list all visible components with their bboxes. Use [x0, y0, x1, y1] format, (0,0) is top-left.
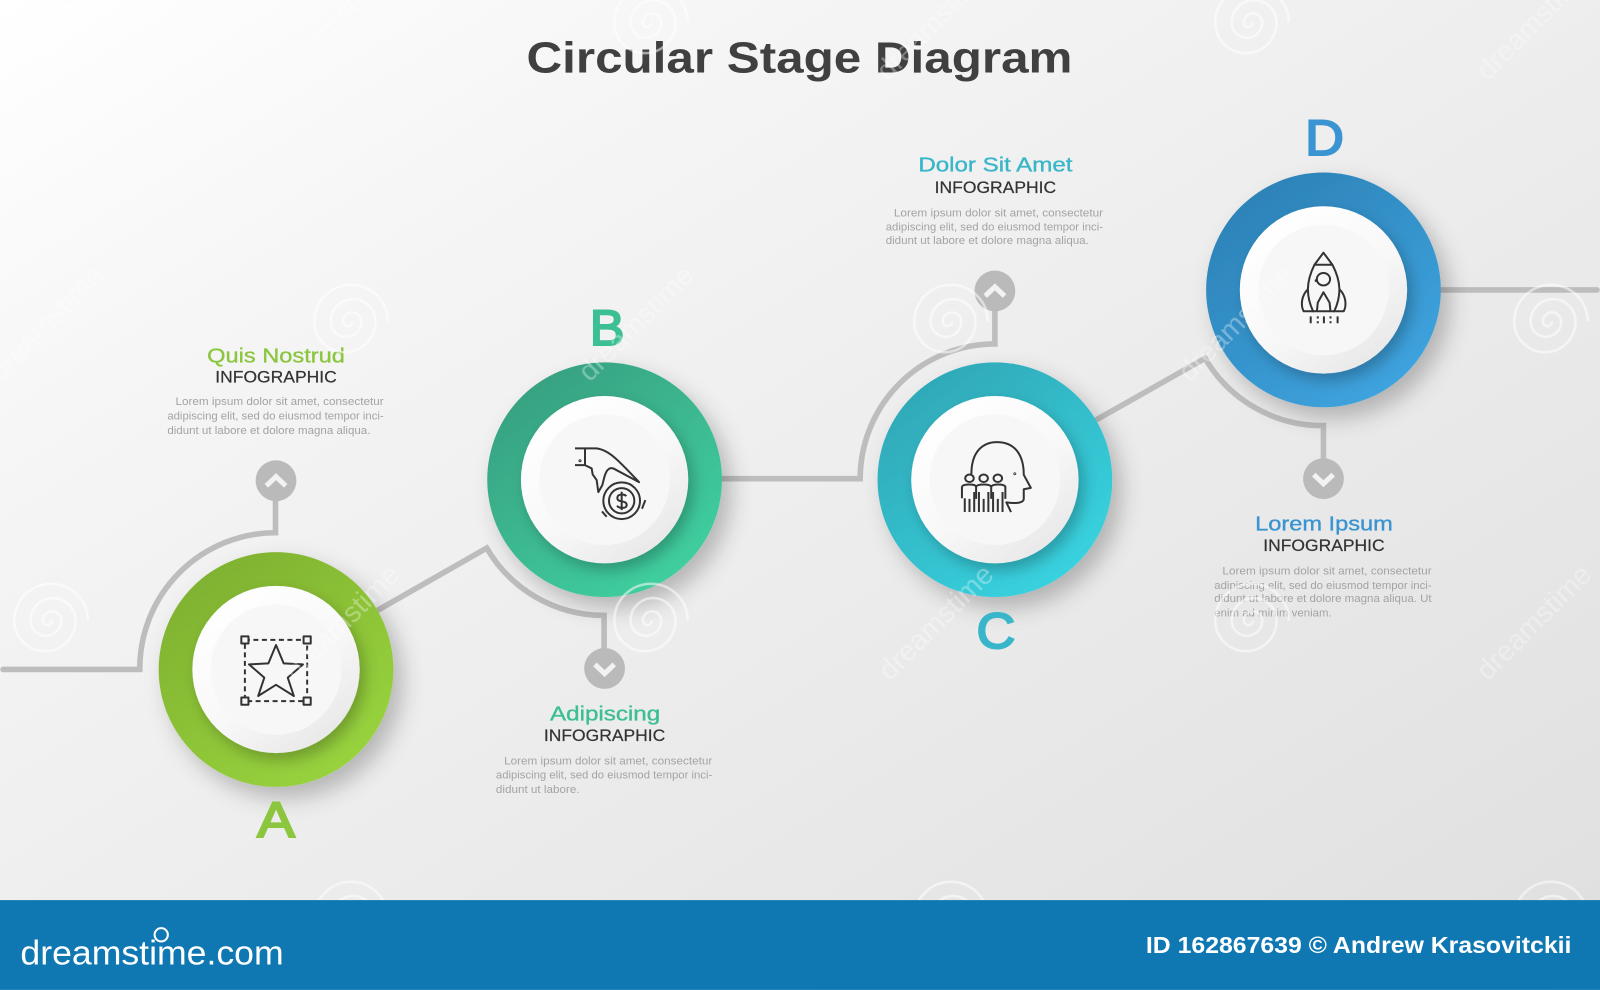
letter A: A — [257, 792, 296, 848]
watermark overlay: dreamstime — [278, 559, 406, 687]
watermark overlay: dreamstime — [1172, 260, 1300, 388]
text block: Lorem Ipsum — [1214, 514, 1433, 619]
title: Circular Stage Diagram — [527, 34, 1072, 83]
text block: Lorem Ipsum: adipiscing elit, sed do eiusmod tempor inci- — [1214, 580, 1432, 592]
letter D: D — [1305, 110, 1344, 166]
icon: hand dropping coin — [575, 448, 645, 519]
text block: Dolor Sit Amet: Lorem ipsum dolor sit amet, consectetur — [894, 207, 1103, 219]
text block: Lorem Ipsum: enim ad minim veniam. — [1214, 607, 1332, 619]
letter C: C — [977, 603, 1015, 659]
stage D circle — [1206, 173, 1441, 407]
text block: Quis Nostrud: didunt ut labore et dolore magna aliqua. — [167, 425, 370, 437]
connector line: stage D exit — [1441, 287, 1597, 293]
text block: Dolor Sit Amet — [886, 155, 1103, 247]
text block: Quis Nostrud: Quis Nostrud — [207, 345, 345, 367]
watermark overlay: dreamstime — [1470, 559, 1598, 687]
text block: Adipiscing: Adipiscing — [550, 704, 660, 726]
text block: Quis Nostrud — [167, 345, 384, 437]
text block: Quis Nostrud: adipiscing elit, sed do eiusmod tempor inci- — [167, 410, 384, 422]
text block: Dolor Sit Amet: Dolor Sit Amet — [918, 155, 1073, 177]
text block: Lorem Ipsum: Lorem Ipsum — [1255, 514, 1393, 536]
text block: Lorem Ipsum: didunt ut labore et dolore magna aliqua. Ut — [1214, 593, 1433, 605]
icon: head with team — [962, 442, 1031, 512]
text block: Adipiscing: didunt ut labore. — [496, 784, 580, 796]
text block: Lorem Ipsum: Lorem ipsum dolor sit amet, consectetur — [1222, 566, 1432, 578]
text block: Adipiscing — [496, 704, 713, 796]
footer credit: ID 162867639 © Andrew Krasovitckii — [1146, 932, 1571, 958]
text block: Adipiscing: INFOGRAPHIC — [544, 727, 666, 745]
footer logo: dreamstime.com — [20, 934, 284, 972]
text block: Dolor Sit Amet: INFOGRAPHIC — [935, 179, 1056, 197]
connector line: stage A to B with knob — [378, 548, 625, 689]
text block: Dolor Sit Amet: adipiscing elit, sed do eiusmod tempor inci- — [886, 222, 1103, 234]
footer banner — [0, 900, 1600, 990]
connector line: start to stage A with knob — [3, 460, 296, 669]
icon: rocket — [1302, 253, 1345, 323]
watermark overlay: dreamstime — [872, 559, 1000, 687]
text block: Lorem Ipsum: INFOGRAPHIC — [1263, 537, 1385, 555]
text block: Adipiscing: adipiscing elit, sed do eiusmod tempor inci- — [496, 770, 713, 782]
letter B: B — [590, 300, 624, 356]
icon: star in dashed frame — [241, 636, 311, 705]
connector line: stage B to C with knob — [720, 271, 1015, 479]
connector line: stage C to D with knob — [1097, 358, 1344, 499]
stage A circle — [159, 552, 393, 787]
text block: Quis Nostrud: Lorem ipsum dolor sit amet, consectetur — [176, 396, 384, 408]
stage C circle — [878, 362, 1112, 597]
text block: Quis Nostrud: INFOGRAPHIC — [215, 369, 337, 387]
stage B circle — [487, 362, 722, 597]
text block: Dolor Sit Amet: didunt ut labore et dolore magna aliqua. — [886, 235, 1089, 247]
watermark overlay: dreamstime — [572, 260, 700, 388]
text block: Adipiscing: Lorem ipsum dolor sit amet, consectetur — [504, 755, 713, 767]
